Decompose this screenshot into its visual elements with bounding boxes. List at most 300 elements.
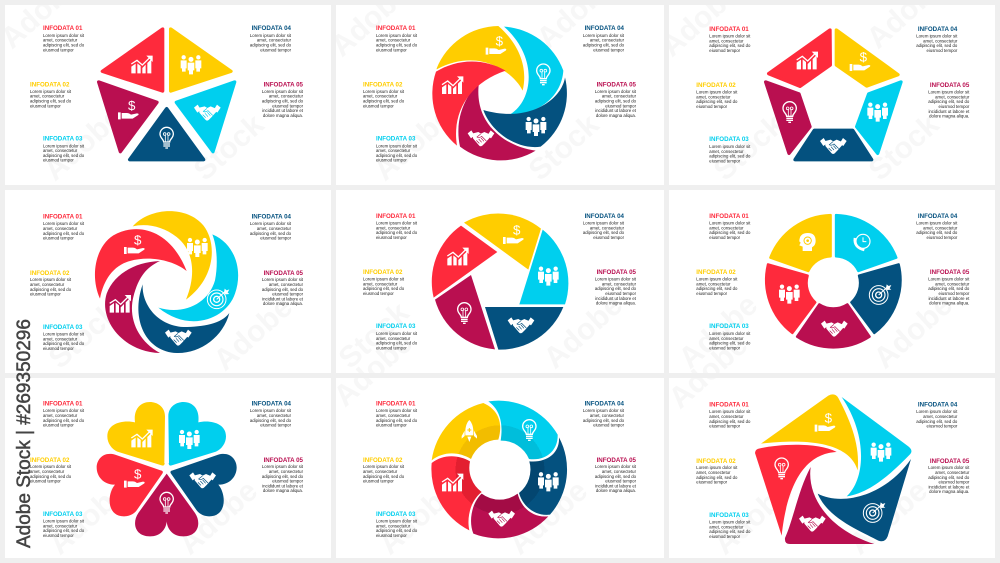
watermarks: Stock [523,108,606,187]
panel 5: circular shutter [336,190,664,373]
watermarks: Adobe [843,474,934,561]
icon: people [538,266,559,286]
text: infodata 04: adipiscing elit, sed do [250,418,292,423]
text: infodata 05: Lorem ipsum dolor sit [262,89,303,94]
text: infodata 03: adipiscing elit, sed do [43,341,85,346]
segment: yellow [432,403,500,460]
text: infodata 02: adipiscing elit, sed do [30,474,72,479]
panel 7 text blocks [30,400,304,538]
text: infodata 01: adipiscing elit, sed do [43,42,85,48]
text: infodata 02: amet, consectetur [363,469,398,474]
text: infodata 04: Lorem ipsum dolor sit [583,408,624,413]
text: infodata 04: amet, consectetur [590,225,625,230]
text: infodata 05: dolore magna aliqua. [929,489,969,494]
panel 6 text blocks [696,213,970,350]
text: infodata 02: INFODATA 02 [363,82,403,88]
text: infodata 02 [696,269,738,296]
text: infodata 02 [30,270,72,297]
text: infodata 02: amet, consectetur [363,281,398,286]
panel 7: heart flower [5,378,331,558]
text: infodata 02: INFODATA 02 [30,82,70,88]
text: infodata 01 [43,400,85,428]
icon: growth chart [131,430,153,447]
segment: blue [138,284,229,353]
segment: blue [170,454,237,516]
text: infodata 03 [43,324,85,351]
text: infodata 05: dolore magna aliqua. [929,301,969,306]
text: infodata 01: eiusmod tempor [43,423,74,428]
text: infodata 02: amet, consectetur [30,469,65,474]
text: infodata 01: amet, consectetur [376,413,411,418]
icon: people [871,442,891,462]
text: infodata 03 [376,511,418,538]
text: infodata 04: INFODATA 04 [252,25,292,32]
text: infodata 03: Lorem ipsum dolor sit [376,143,417,148]
text: infodata 03: Lorem ipsum dolor sit [709,144,750,149]
panel 8: pinwheel donut [336,378,664,558]
text: infodata 04: Lorem ipsum dolor sit [250,408,291,413]
text: infodata 05: amet, consectetur [935,281,970,286]
text: infodata 05: adipiscing elit, sed do [262,287,304,292]
text: infodata 05 [595,269,637,306]
text: infodata 05: eiusmod tempor [605,103,637,108]
text: infodata 04: adipiscing elit, sed do [916,419,958,424]
text: infodata 02: adipiscing elit, sed do [696,475,738,480]
text: infodata 01: amet, consectetur [709,38,744,43]
text: infodata 03: adipiscing elit, sed do [376,153,418,158]
text: infodata 04: Lorem ipsum dolor sit [916,34,957,39]
icon: growth chart [442,76,463,94]
text: infodata 01: Lorem ipsum dolor sit [43,408,84,413]
icon: light bulb [458,303,471,323]
segment: cyan [857,82,901,153]
text: infodata 04: amet, consectetur [257,226,292,231]
text: infodata 04 [250,25,292,52]
text: infodata 03: Lorem ipsum dolor sit [709,520,750,525]
text: infodata 03: INFODATA 03 [709,512,749,519]
text: infodata 05: amet, consectetur [269,282,304,287]
text: infodata 01: INFODATA 01 [376,400,416,407]
text: infodata 02: Lorem ipsum dolor sit [30,89,71,94]
icon: hand with dollar [118,98,139,119]
text: infodata 01: adipiscing elit, sed do [376,230,418,235]
text: infodata 02: amet, consectetur [30,94,65,99]
text: infodata 05: Lorem ipsum dolor sit [595,89,636,94]
text: infodata 01: Lorem ipsum dolor sit [376,221,417,226]
text: infodata 01: eiusmod tempor [709,424,741,429]
text: infodata 05: INFODATA 05 [930,269,970,276]
text: infodata 02: adipiscing elit, sed do [363,286,405,291]
segment: red [97,454,163,516]
icon: phone and clock [855,234,870,250]
text: infodata 03: INFODATA 03 [376,511,416,518]
pentagon ring diagram [766,30,901,160]
text: infodata 04: INFODATA 04 [918,26,958,33]
text: infodata 05: Lorem ipsum dolor sit [928,277,969,282]
text: infodata 02: INFODATA 02 [363,269,403,276]
watermarks: Stock [863,108,946,187]
segment: blue [130,109,204,160]
text: infodata 03: eiusmod tempor [376,158,407,163]
donut diagram [766,215,901,347]
text: infodata 01: amet, consectetur [709,225,744,230]
panel 6: donut chart [669,190,995,373]
text: infodata 05: eiusmod tempor [605,291,637,296]
text: infodata 02 [30,457,72,484]
text: infodata 01: amet, consectetur [43,226,78,231]
text: infodata 01: amet, consectetur [43,413,78,418]
text: infodata 05 [928,458,970,494]
segment: cyan [158,234,238,321]
text: infodata 04 [250,214,292,241]
panel 4 text blocks [30,214,304,351]
text: infodata 05: INFODATA 05 [930,458,970,465]
text: infodata 03: eiusmod tempor [376,345,407,350]
text: infodata 05: INFODATA 05 [930,82,970,89]
text: infodata 04: adipiscing elit, sed do [583,230,625,235]
text: infodata 02: Lorem ipsum dolor sit [30,277,71,282]
icon: light bulb [537,64,550,85]
text: infodata 02: eiusmod tempor [363,479,394,484]
segment: blue [818,459,911,541]
text: infodata 05: adipiscing elit, sed do [595,98,637,104]
panel 9 text blocks [696,402,970,539]
text: infodata 02: amet, consectetur [30,282,65,287]
text: infodata 04: eiusmod tempor [926,48,958,53]
icon: rocket [462,420,477,442]
icon: handshake [508,317,534,333]
icon: people [181,55,201,74]
segment: red [431,456,482,530]
segment: yellow [437,26,524,91]
watermarks: Adobe [538,288,629,375]
segment: red [102,29,163,91]
text: infodata 05 [262,82,304,118]
text: infodata 05: adipiscing elit, sed do [262,98,304,104]
text: infodata 04 [583,400,625,428]
text: infodata 03: INFODATA 03 [376,323,416,330]
icon: light bulb [160,492,173,513]
text: infodata 05: Lorem ipsum dolor sit [262,464,303,469]
text: infodata 04: amet, consectetur [923,225,958,230]
text: infodata 04: adipiscing elit, sed do [250,42,292,48]
icon: target [869,284,891,304]
text: infodata 05: amet, consectetur [269,94,304,99]
segment: yellow [770,215,831,271]
text: infodata 02: adipiscing elit, sed do [363,98,405,104]
watermarks: Adobe [373,474,464,561]
text: infodata 03: adipiscing elit, sed do [43,528,85,533]
segment: red [766,264,815,333]
text: infodata 04: amet, consectetur [590,413,625,418]
text: infodata 01: INFODATA 01 [43,25,83,32]
text: infodata 03: INFODATA 03 [43,324,83,331]
text: infodata 01: Lorem ipsum dolor sit [709,221,750,226]
text: infodata 04: adipiscing elit, sed do [250,231,292,236]
text: infodata 03: amet, consectetur [376,336,411,341]
text: infodata 04: Lorem ipsum dolor sit [916,221,957,226]
watermarks: Stock [43,296,126,375]
text: infodata 01: INFODATA 01 [709,26,749,33]
text: infodata 01: Lorem ipsum dolor sit [43,33,84,38]
text: infodata 01 [709,213,751,240]
text: infodata 01: amet, consectetur [709,414,744,419]
watermarks: Adobe [673,288,764,375]
text: infodata 05: INFODATA 05 [264,82,304,88]
text: infodata 05: dolore magna aliqua. [263,488,303,493]
watermarks: Adobe [663,328,754,415]
text: infodata 03: amet, consectetur [376,148,411,153]
text: infodata 03: adipiscing elit, sed do [709,154,751,159]
icon: growth chart [110,295,131,313]
text: infodata 04: INFODATA 04 [918,401,958,408]
text: infodata 05: adipiscing elit, sed do [928,286,970,291]
text: infodata 04: eiusmod tempor [593,423,625,428]
text: infodata 02 [696,458,738,485]
text: infodata 05: incididunt ut labore et [262,108,304,113]
text: infodata 03 [376,323,418,350]
text: infodata 04 [916,26,958,53]
text: infodata 03: adipiscing elit, sed do [709,529,751,534]
text: infodata 01: adipiscing elit, sed do [43,231,85,236]
watermarks: Adobe [38,100,129,187]
text: infodata 05: incididunt ut labore et [595,483,637,488]
text: infodata 05: incididunt ut labore et [595,108,637,113]
watermarks: Adobe [868,288,959,375]
text: infodata 01: INFODATA 01 [709,401,749,408]
icon: handshake [165,330,192,346]
text: infodata 01: eiusmod tempor [376,235,407,240]
segment: cyan [168,402,226,466]
text: infodata 05: eiusmod tempor [938,291,970,296]
text: infodata 03 [43,511,85,538]
text: infodata 03: Lorem ipsum dolor sit [43,519,84,524]
text: infodata 02: eiusmod tempor [363,291,394,296]
text: infodata 02: eiusmod tempor [30,103,61,108]
text: infodata 01: adipiscing elit, sed do [43,418,85,423]
icon: people [526,117,546,136]
text: infodata 05: eiusmod tempor [272,103,304,108]
text: infodata 03: eiusmod tempor [709,158,741,163]
icon: hand with dollar [503,223,524,244]
icon: handshake [189,472,216,488]
text: infodata 01: eiusmod tempor [376,47,407,52]
text: infodata 01 [376,25,418,52]
text: infodata 05: incididunt ut labore et [262,483,304,488]
segment: blue [483,77,567,147]
text: infodata 02: Lorem ipsum dolor sit [363,89,404,94]
text: infodata 05 [928,82,970,119]
icon: light bulb [775,458,788,479]
text: infodata 04: eiusmod tempor [926,424,958,429]
text: infodata 05: dolore magna aliqua. [596,488,636,493]
text: infodata 04 [583,213,625,240]
text: infodata 03: adipiscing elit, sed do [709,341,751,346]
segment: red [432,61,506,146]
text: infodata 04: Lorem ipsum dolor sit [583,33,624,38]
text: infodata 02: Lorem ipsum dolor sit [363,277,404,282]
text: infodata 01: INFODATA 01 [376,213,416,220]
text: infodata 02: Lorem ipsum dolor sit [696,277,737,282]
watermarks: Adobe [328,326,419,413]
text: infodata 03: Lorem ipsum dolor sit [43,332,84,337]
text: infodata 05: adipiscing elit, sed do [928,99,970,104]
crescent swirl diagram [95,211,238,353]
watermarks: Adobe [173,474,264,561]
text: infodata 05: amet, consectetur [602,469,637,474]
text: infodata 04: INFODATA 04 [252,400,292,407]
text: infodata 03 [709,136,751,163]
text: infodata 02 [696,82,738,109]
text: infodata 05: dolore magna aliqua. [929,114,969,119]
panel 4: crescent swirl [5,190,331,373]
text: infodata 02: eiusmod tempor [696,104,728,109]
text: infodata 02: adipiscing elit, sed do [30,98,72,104]
text: infodata 02: adipiscing elit, sed do [696,286,738,291]
pinwheel donut diagram [431,401,567,538]
text: infodata 05: eiusmod tempor [605,479,637,484]
text: infodata 01: eiusmod tempor [43,47,74,52]
icon: target [207,289,229,309]
text: infodata 02: adipiscing elit, sed do [363,474,405,479]
segment: magenta [785,467,874,544]
text: infodata 01 [709,26,751,53]
text: infodata 03: amet, consectetur [43,336,78,341]
shutter diagram [432,214,568,350]
text: infodata 04: amet, consectetur [257,38,292,43]
text: infodata 03 [43,136,85,163]
watermarks: Adobe [503,474,594,561]
panel 8 text blocks [363,400,637,538]
icon: light bulb [523,420,536,440]
text: infodata 04: INFODATA 04 [252,214,292,221]
segment: magenta [105,261,160,353]
text: infodata 05: incididunt ut labore et [928,296,970,301]
icon: target [863,502,885,522]
text: infodata 02: Lorem ipsum dolor sit [696,465,737,470]
segment: yellow [133,211,212,300]
text: infodata 01: amet, consectetur [376,38,411,43]
segment: magenta [766,82,810,153]
text: infodata 01: adipiscing elit, sed do [376,42,418,48]
text: infodata 03: Lorem ipsum dolor sit [376,331,417,336]
watermarks: Adobe [708,474,799,561]
text: infodata 02: INFODATA 02 [696,269,736,276]
segment: magenta [458,83,536,160]
pentagon diagram [99,29,235,160]
text: infodata 04: amet, consectetur [923,414,958,419]
text: infodata 01: Lorem ipsum dolor sit [709,409,750,414]
panel 2 text blocks [363,25,637,163]
text: infodata 04: amet, consectetur [590,38,625,43]
text: infodata 02: INFODATA 02 [696,458,736,465]
text: infodata 01 [43,25,85,52]
text: infodata 02: INFODATA 02 [30,457,70,464]
text: infodata 05: eiusmod tempor [272,292,304,297]
icon: handshake [468,130,494,146]
text: infodata 03 [709,512,751,539]
text: infodata 01: adipiscing elit, sed do [376,418,418,423]
text: infodata 03: eiusmod tempor [43,533,74,538]
segment: cyan [842,397,911,496]
segment: yellow [836,30,898,86]
text: infodata 04: eiusmod tempor [260,236,292,241]
text: infodata 02: adipiscing elit, sed do [30,287,72,292]
text: infodata 03: amet, consectetur [709,524,744,529]
text: infodata 03: eiusmod tempor [709,534,741,539]
panel 1: pentagon of triangles [5,5,331,185]
text: infodata 03: INFODATA 03 [43,136,83,142]
text: infodata 01: INFODATA 01 [43,400,83,407]
text: infodata 05: adipiscing elit, sed do [595,474,637,479]
text: infodata 05 [595,457,637,493]
icon: growth chart [797,52,818,69]
text: infodata 02: eiusmod tempor [696,480,728,485]
icon: hand with dollar [815,410,835,432]
text: infodata 04 [916,213,958,240]
segment: cyan [504,27,563,114]
text: infodata 05: INFODATA 05 [597,269,637,276]
segment: red [769,30,830,86]
text: infodata 04: INFODATA 04 [918,213,958,220]
text: infodata 05 [928,269,970,306]
text: infodata 02: amet, consectetur [696,281,731,286]
icon: people [179,430,200,449]
icon: people [779,284,800,304]
text: infodata 03: amet, consectetur [709,149,744,154]
text: infodata 03: amet, consectetur [43,523,78,528]
text: infodata 02: amet, consectetur [696,94,731,99]
text: infodata 05: incididunt ut labore et [928,484,970,489]
icon: growth chart [442,474,463,491]
text: infodata 01: eiusmod tempor [709,235,741,240]
text: infodata 01: amet, consectetur [376,225,411,230]
text: infodata 04 [916,402,958,429]
text: infodata 05: INFODATA 05 [597,82,637,88]
segment: yellow [107,402,165,466]
text: infodata 01: INFODATA 01 [376,25,416,32]
text: infodata 04: INFODATA 04 [585,25,625,32]
panel 3 text blocks [696,26,970,163]
text: infodata 01 [43,214,85,241]
text: infodata 05: eiusmod tempor [938,104,970,109]
text: infodata 04: Lorem ipsum dolor sit [250,221,291,226]
text: infodata 01: Lorem ipsum dolor sit [376,33,417,38]
text: infodata 04: INFODATA 04 [585,213,625,220]
segment: red [432,226,497,298]
text: infodata 03: Lorem ipsum dolor sit [709,331,750,336]
text: infodata 05: amet, consectetur [269,469,304,474]
watermarks: Stock [708,108,791,187]
text: infodata 05: Lorem ipsum dolor sit [262,277,303,282]
watermarks: Stock [188,108,271,187]
text: infodata 04: adipiscing elit, sed do [583,418,625,423]
segment: yellow [761,394,858,470]
text: infodata 03: Lorem ipsum dolor sit [376,519,417,524]
text: infodata 01: INFODATA 01 [709,213,749,220]
text: infodata 04: eiusmod tempor [260,423,292,428]
text: infodata 03 [709,323,751,350]
text: infodata 03: eiusmod tempor [709,345,741,350]
icon: light bulb [160,127,173,148]
text: infodata 02: eiusmod tempor [363,103,394,108]
text: infodata 02: INFODATA 02 [30,270,70,277]
panel 3: pentagon ring [669,5,995,185]
text: infodata 02: eiusmod tempor [30,479,61,484]
icon: growth chart [447,248,469,265]
segment: red [95,229,187,299]
segment: cyan [519,230,568,304]
